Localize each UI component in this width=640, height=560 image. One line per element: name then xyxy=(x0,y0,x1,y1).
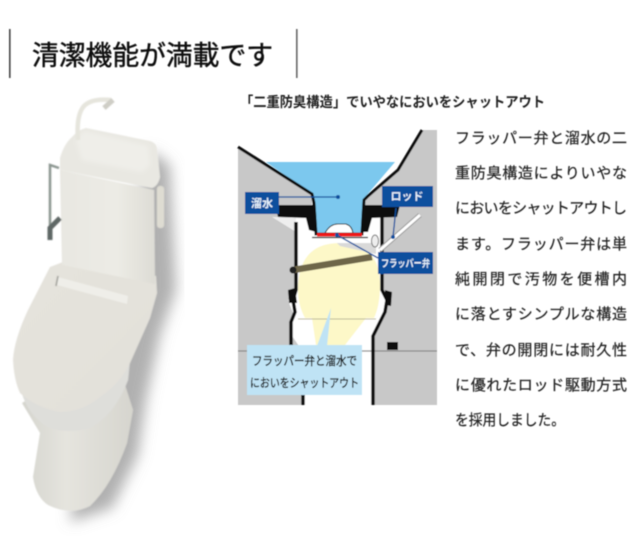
description text xyxy=(455,130,627,429)
subheading: 「二重防臭構造」でいやなにおいをシャットアウト xyxy=(240,94,545,110)
callout: フラッパー弁と溜水で xyxy=(252,353,357,368)
gray surround xyxy=(238,130,437,405)
toilet lid xyxy=(13,262,157,412)
label: flapper valve: フラッパー弁 xyxy=(381,257,430,270)
label: flapper valve xyxy=(378,252,433,274)
spring xyxy=(293,257,372,270)
label: rod: ロッド xyxy=(390,191,424,203)
pipe interior xyxy=(288,217,388,405)
leader lines xyxy=(279,197,396,258)
pipe outlines xyxy=(291,217,387,405)
description text: 重防臭構造によりいやな xyxy=(455,165,627,182)
label: rod xyxy=(382,186,433,207)
pipe gaskets xyxy=(288,288,392,306)
description text: を採用しました。 xyxy=(455,412,565,429)
tank body xyxy=(60,170,155,284)
callout xyxy=(247,345,362,395)
label: water seal: 溜水 xyxy=(251,196,273,210)
callout: においをシャットアウト xyxy=(250,376,359,390)
toilet base xyxy=(22,380,133,511)
description text: においをシャットアウトし xyxy=(455,200,627,217)
flush lever xyxy=(157,186,164,228)
tank hand basin xyxy=(60,128,160,188)
title: 清潔機能が満載です xyxy=(32,41,273,71)
valve dome xyxy=(325,224,353,233)
description text: 純開閉で汚物を便槽内 xyxy=(455,271,627,288)
description text: に落とすシンプルな構造 xyxy=(455,306,627,323)
description text: フラッパー弁と溜水の二 xyxy=(455,130,627,147)
cross-section diagram xyxy=(238,130,437,405)
callout tail xyxy=(317,308,331,346)
description text: に優れたロッド駆動方式 xyxy=(455,377,627,394)
seat rim xyxy=(20,360,130,431)
faucet spout xyxy=(78,100,111,140)
label: water seal xyxy=(245,192,279,214)
stop valve xyxy=(50,218,60,240)
bowl outline xyxy=(238,130,422,234)
toilet shadow xyxy=(70,150,176,522)
flapper valve xyxy=(317,233,362,236)
toilet illustration xyxy=(13,100,176,522)
hinge parts xyxy=(337,243,376,254)
yellow air column xyxy=(298,243,380,345)
water seal xyxy=(266,162,395,233)
leader dots xyxy=(335,195,395,239)
black seal blocks xyxy=(275,205,400,232)
seat hinge slot xyxy=(57,277,128,304)
description text: で、弁の開閉には耐久性 xyxy=(455,342,627,359)
small flange xyxy=(387,342,398,350)
floor line xyxy=(238,350,437,352)
rod xyxy=(380,215,420,250)
description text: ます。フラッパー弁は単 xyxy=(455,236,627,253)
water supply pipe xyxy=(50,165,59,228)
